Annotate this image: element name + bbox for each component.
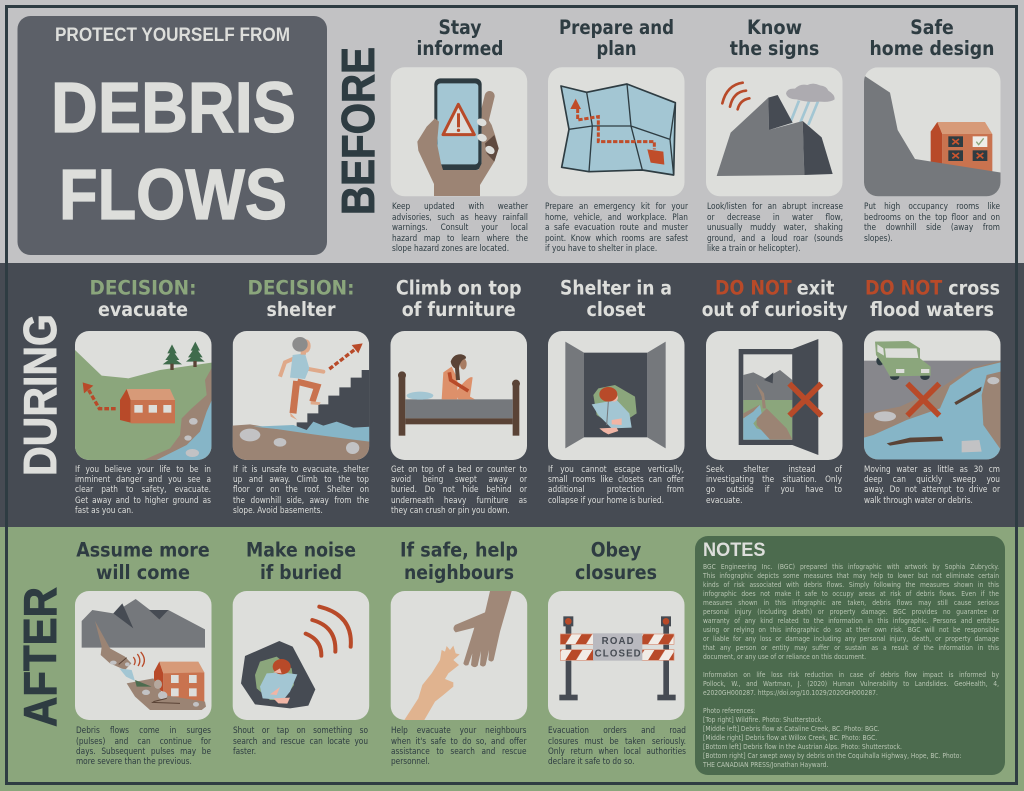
text: disclaimer and references: BGC Engineering Inc. (BGC) prepared this infographic with artwork by Sophia Zubrycky.: [703, 562, 999, 570]
illustration: car and flooded road with red cross: [862, 330, 1003, 462]
text: shelter: If it is unsafe to evacuate, shelter: [233, 464, 369, 474]
text: stay informed: advisories, such as heavy rainfall: [392, 212, 528, 222]
text: disclaimer and references: [Middle right] Debris flow at Willox Creek, BC. Photo: BGC.: [703, 733, 877, 742]
heading: safe home design: [870, 16, 994, 60]
illustration: person climbing stairs: [232, 331, 370, 462]
illustration: road closed barricade: [548, 591, 684, 720]
heading: shelter in a closet: Shelter in a: [560, 276, 672, 299]
text: do not exit: evacuate.: [706, 495, 742, 505]
illustration: door open to debris flow with red cross: [706, 331, 842, 460]
heading: decision evacuate: evacuate: [98, 298, 188, 321]
heading: decision evacuate: [90, 276, 196, 321]
heading: obey closures: closures: [575, 561, 657, 584]
illustration: person on top of bed: [390, 331, 527, 460]
text: disclaimer and references: using or relying on this infographic do so at their own risk. BGC will not be responsible: [703, 625, 999, 634]
text: shelter: floor or on the roof. Shelter on: [233, 484, 369, 494]
text: help neighbours: personnel.: [391, 756, 430, 766]
text: know the signs: ground, and a loud roar (sounds: [706, 233, 842, 243]
heading: make noise if buried: [246, 539, 356, 584]
text: disclaimer and references: infographic does not make it safe to occupy areas at risk of debris flows. Even if the: [703, 589, 999, 598]
text: disclaimer and references: personal injury (including death) or property damage. BGC provides no guarantee or: [703, 607, 999, 616]
text: evacuate: imminent danger and you see a: [75, 474, 211, 484]
text: climb on furniture: they can crush or pin you down.: [391, 505, 510, 515]
text: assume more will come: (pulses) and can continue for: [76, 736, 210, 746]
text: shelter: up and away. Climb to the top: [233, 474, 369, 484]
text: obey closures: declare it safe to do so.: [548, 756, 635, 766]
heading: make noise if buried: if buried: [260, 561, 342, 584]
text: help neighbours: [391, 725, 526, 766]
text: do not cross: Moving water as little as 30 cm: [864, 464, 1000, 474]
text: disclaimer and references: [Top right] Wildfire. Photo: Shutterstock.: [703, 715, 823, 724]
heading: notes: NOTES: [703, 539, 765, 561]
text: climb on furniture: [391, 464, 528, 515]
heading: do not exit out of curiosity: exit: [797, 276, 834, 299]
text: assume more will come: days. Subsequent pulses may be: [76, 746, 210, 756]
text: prepare and plan: Prepare an emergency kit for your: [545, 201, 688, 211]
text: disclaimer and references: that any person or entity may suffer or sustain as a result of the information in this: [703, 643, 999, 652]
heading: decision shelter: shelter: [266, 298, 336, 321]
text: disclaimer and references: warranty of any kind related to the information in this infographic. Persons and entities: [703, 616, 999, 625]
heading: climb on top of furniture: of furniture: [402, 298, 516, 321]
text: closet: additional protection from: [548, 484, 684, 494]
heading: DURING: DURING: [14, 314, 66, 476]
panel: notes: [695, 536, 1005, 775]
text: know the signs: like a train or helicopter).: [706, 243, 800, 253]
heading: prepare and plan: plan: [596, 37, 636, 60]
illustration: folded evacuation map: [548, 67, 684, 196]
heading: know the signs: [730, 16, 819, 60]
text: shelter: the downhill side, away from the: [233, 495, 369, 505]
heading: prepare and plan: Prepare and: [559, 16, 674, 39]
heading: decision shelter: [248, 276, 354, 321]
panel: during: [0, 263, 1024, 527]
text: help neighbours: when it's safe to do so, and offer: [391, 736, 526, 746]
text: know the signs: Look/listen for an abrupt increase: [706, 201, 842, 211]
heading: make noise if buried: Make noise: [246, 539, 356, 562]
text: make noise: Shout or tap on something so: [233, 725, 368, 735]
illustration: evacuate uphill from house: [73, 331, 213, 462]
text: obey closures: [548, 725, 686, 766]
illustration: hand holding phone with warning: [391, 67, 527, 196]
text: assume more will come: Debris flows come in surges: [76, 725, 210, 735]
title block: DEBRIS: [51, 69, 296, 148]
title block: FLOWS: [59, 156, 287, 235]
heading: do not cross flood waters: cross: [948, 276, 1000, 299]
heading: decision evacuate: DECISION:: [90, 276, 196, 299]
heading: safe home design: Safe: [910, 16, 954, 39]
text: safe home design: the downhill side (away from: [864, 222, 1000, 232]
text: disclaimer and references: Photo references:: [703, 706, 756, 715]
heading: obey closures: Obey: [591, 539, 642, 562]
text: do not exit: investigating the situation. Only: [706, 474, 842, 484]
heading: safe home design: home design: [870, 37, 994, 60]
heading: if safe help neighbours: neighbours: [404, 561, 514, 584]
text: closet: If you cannot escape vertically,: [548, 464, 684, 474]
text: make noise: faster.: [233, 746, 256, 756]
text: disclaimer and references: [Bottom left] Debris flow in the Austrian Alps. Photo: Shutterstock.: [703, 742, 902, 751]
text: do not exit: [706, 464, 842, 505]
text: safe home design: Put high occupancy rooms like: [864, 201, 1000, 211]
text: closet: small rooms like closets can offer: [548, 474, 684, 484]
text: shelter: [233, 464, 370, 515]
text: stay informed: warnings. Consult your local: [392, 222, 528, 232]
text: stay informed: hazard map to learn where the: [392, 233, 528, 243]
text: know the signs: or decrease in water flow,: [706, 212, 842, 222]
text: evacuate: clear path to safety, evacuate.: [75, 484, 211, 494]
panel: before: [18, 16, 1000, 255]
illustration: mountain, rumble and storm cloud: [706, 67, 842, 196]
illustration: road closed barricade: ROAD: [602, 636, 634, 647]
heading: know the signs: the signs: [730, 37, 819, 60]
text: prepare and plan: a safe evacuation route and muster: [545, 222, 688, 232]
heading: do not cross flood waters: [865, 276, 1000, 321]
text: obey closures: Only return when local authorities: [548, 746, 686, 756]
text: disclaimer and references: e2020GH000287. https://doi.org/10.1029/2020GH000287.: [703, 688, 878, 697]
text: disclaimer and references: measures shown in this infographic are taken, debris flows may still cause serious: [703, 598, 999, 607]
text: closet: collapse if your home is buried.: [548, 495, 664, 505]
heading: if safe help neighbours: [400, 539, 518, 584]
text: disclaimer and references: Information on life loss risk reduction in case of debris flow impact is informed by: [703, 670, 999, 679]
text: evacuate: Get away and to higher ground as: [75, 495, 211, 505]
heading: assume more will come: [76, 539, 210, 584]
text: shelter: slope. Avoid basements.: [233, 505, 323, 515]
text: safe home design: [864, 201, 1000, 243]
text: evacuate: If you believe your life to be in: [75, 464, 211, 474]
text: prepare and plan: home, vehicle, and workplace. Plan: [545, 212, 688, 222]
text: do not cross: [864, 464, 1000, 505]
text: stay informed: [392, 201, 528, 253]
text: disclaimer and references: This infographic depicts some measures that may help to lower but not eliminate certain: [703, 571, 999, 580]
heading: stay informed: Stay: [438, 16, 482, 39]
text: disclaimer and references: kinds of risk associated with debris flows. Simply following the measures shown in this: [703, 580, 999, 589]
heading: shelter in a closet: [560, 276, 672, 321]
title block: [18, 16, 327, 255]
heading: do not cross flood waters: flood waters: [870, 298, 994, 321]
text: stay informed: slope hazard zones are located.: [392, 243, 509, 253]
heading: obey closures: [575, 539, 657, 584]
text: prepare and plan: point. Know which rooms are safest: [545, 233, 688, 243]
heading: prepare and plan: [559, 16, 674, 60]
text: prepare and plan: [545, 201, 688, 253]
illustration: house on slope: [862, 67, 1002, 198]
text: do not cross: deep can quickly sweep you: [864, 474, 1000, 484]
text: do not cross: walk through water or debris.: [864, 495, 973, 505]
text: climb on furniture: buried. Do not hide behind or: [391, 484, 527, 494]
heading: stay informed: [416, 16, 504, 60]
heading: climb on top of furniture: [396, 276, 522, 321]
heading: do not exit out of curiosity: DO NOT: [715, 276, 792, 299]
text: disclaimer and references: or liable for any loss or damage including any personal injury, death, or property damage: [703, 634, 999, 643]
heading: if safe help neighbours: If safe, help: [400, 539, 518, 562]
text: safe home design: bedrooms on the top floor and on: [864, 212, 1000, 222]
heading: BEFORE: BEFORE: [332, 47, 384, 215]
text: assume more will come: [76, 725, 211, 766]
illustration: two reaching hands: [391, 591, 527, 720]
illustration: road closed barricade: CLOSED: [595, 648, 641, 659]
heading: know the signs: Know: [747, 16, 802, 39]
text: stay informed: Keep updated with weather: [392, 201, 528, 211]
text: climb on furniture: avoid being swept away or: [391, 474, 527, 484]
text: assume more will come: more severe than the previous.: [76, 756, 191, 766]
title block: PROTECT YOURSELF FROM: [55, 25, 290, 46]
heading: stay informed: informed: [416, 37, 504, 60]
illustration: person crouching in closet: [548, 331, 684, 460]
text: help neighbours: assistance to search and rescue: [391, 746, 526, 756]
text: safe home design: slopes).: [864, 233, 893, 243]
heading: decision shelter: DECISION:: [248, 276, 354, 299]
text: know the signs: unusually muddy water, shaking: [706, 222, 842, 232]
text: disclaimer and references: [Middle left] Debris flow at Cataline Creek, BC. Photo: BGC.: [703, 724, 880, 733]
text: closet: [548, 464, 684, 505]
text: disclaimer and references: THE CANADIAN PRESS/Jonathan Hayward.: [703, 760, 828, 769]
text: obey closures: Evacuation orders and road: [548, 725, 686, 735]
illustration: debris surge reaching house: [75, 591, 212, 720]
text: climb on furniture: Get on top of a bed or counter to: [391, 464, 527, 474]
text: disclaimer and references: document, or any use of or reliance on this document.: [703, 652, 866, 661]
heading: shelter in a closet: closet: [586, 298, 646, 321]
text: prepare and plan: if you have to shelter in place.: [545, 243, 657, 253]
heading: do not exit out of curiosity: [702, 276, 848, 321]
heading: do not exit out of curiosity: out of curiosity: [702, 298, 848, 321]
text: evacuate: fast as you can.: [75, 505, 133, 515]
text: do not exit: Seek shelter instead of: [706, 464, 842, 474]
text: do not cross: away. Do not attempt to drive or: [864, 484, 1000, 494]
text: know the signs: [706, 201, 843, 253]
heading: assume more will come: Assume more: [76, 539, 210, 562]
text: help neighbours: Help evacuate your neighbours: [391, 725, 526, 735]
text: climb on furniture: underneath heavy furniture as: [391, 495, 527, 505]
heading: AFTER: AFTER: [14, 587, 66, 727]
text: make noise: search and rescue can locate you: [233, 736, 368, 746]
heading: assume more will come: will come: [96, 561, 190, 584]
text: disclaimer and references: Pollock, W., and Wartman, J. (2020) Human Vulnerability to Landslides. GeoHealth, 4,: [703, 679, 999, 688]
panel: after: [0, 527, 1024, 791]
heading: do not cross flood waters: DO NOT: [865, 276, 943, 299]
illustration: buried person making noise: [233, 591, 369, 720]
text: make noise: [233, 725, 368, 756]
text: obey closures: closures must be taken seriously.: [548, 736, 686, 746]
heading: climb on top of furniture: Climb on top: [396, 276, 522, 299]
text: disclaimer and references: [Bottom right] Car swept away by debris on the Coquihalla Highway, Hope, BC. Photo:: [703, 751, 961, 760]
text: evacuate: [75, 464, 211, 515]
text: disclaimer and references: [703, 562, 999, 769]
text: do not exit: go outside if you have to: [706, 484, 842, 494]
